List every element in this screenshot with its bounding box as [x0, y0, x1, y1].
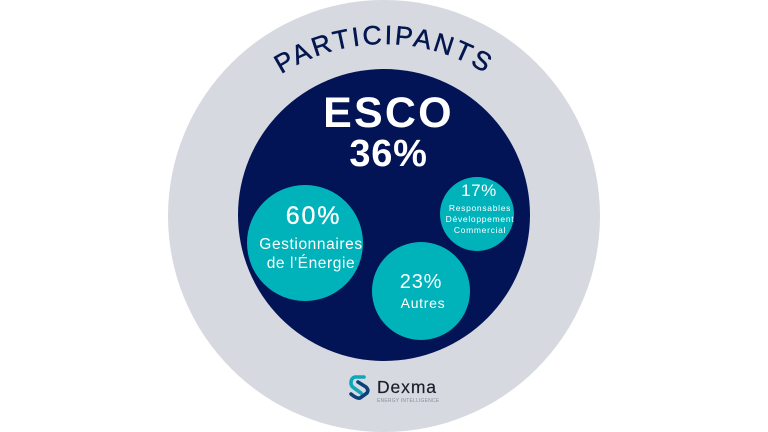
bubble: 23% Autres: Autres: [401, 295, 445, 311]
bubble: 17% Responsables Développement Commercial: Commercial: [454, 225, 506, 235]
bubble: 60% Gestionnaires de l'Énergie: de l'Énergie: [267, 255, 355, 272]
outer grey circle panel: [168, 0, 600, 432]
bubble: 23% Autres: 23%: [400, 271, 442, 293]
bubble: 23% Autres: [372, 242, 470, 340]
bubble: 60% Gestionnaires de l'Énergie: Gestionnaires: [259, 236, 363, 253]
wordmark: Dexma: [377, 377, 437, 397]
bubble: 60% Gestionnaires de l'Énergie: 60%: [286, 202, 341, 230]
bubble: 60% Gestionnaires de l'Énergie: [247, 185, 363, 301]
logo: Dexma: [351, 377, 440, 404]
bubble: 17% Responsables Développement Commercial: 17%: [461, 181, 497, 200]
tagline: ENERGY INTELLIGENCE: [377, 398, 440, 404]
title: PARTICIPANTS: PARTICIPANTS: [274, 26, 492, 74]
bubble: 17% Responsables Développement Commercial: [440, 177, 514, 251]
heading: ESCO: ESCO: [323, 89, 454, 137]
figure: 36%: 36%: [349, 133, 428, 175]
bubble: 17% Responsables Développement Commercial: Développement: [446, 214, 514, 224]
icon: Dexma mark: [351, 377, 368, 398]
bubble: 17% Responsables Développement Commercial: Responsables: [449, 203, 511, 213]
navy circle panel: ESCO: [238, 69, 530, 361]
